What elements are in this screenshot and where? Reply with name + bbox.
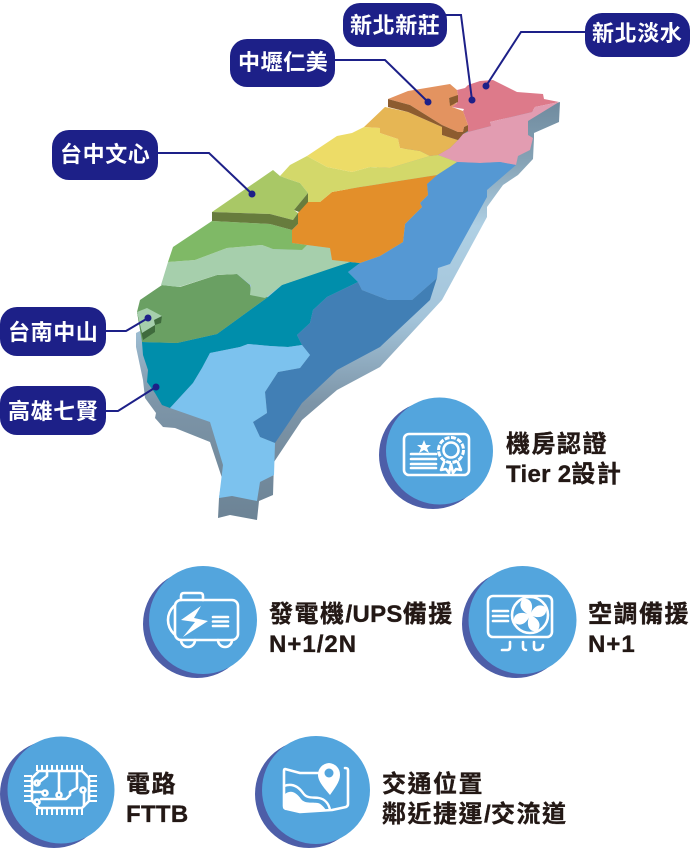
icon: air conditioner bbox=[462, 566, 576, 678]
label: 新北淡水 bbox=[585, 13, 690, 57]
label: 高雄七賢 bbox=[0, 386, 106, 435]
region: pingtung light blue bbox=[170, 344, 310, 501]
connector: 高雄七賢 bbox=[104, 384, 160, 411]
region: hsinchu gold bbox=[364, 107, 458, 156]
region: kaohsiung teal bbox=[142, 262, 360, 408]
region: yilan pink bbox=[438, 102, 559, 165]
text: 電路: 電路 bbox=[126, 771, 177, 798]
text: 電路: FTTB bbox=[126, 801, 189, 828]
label: 台中文心: 台中文心 bbox=[60, 142, 150, 167]
label: 中壢仁美: 中壢仁美 bbox=[238, 50, 328, 75]
region: tainan dark green bbox=[137, 274, 268, 343]
feature: location bbox=[255, 736, 567, 848]
region: tainan raised bbox=[137, 308, 162, 340]
map side extrusion bbox=[136, 102, 560, 520]
text: 機房認證: Tier 2設計 bbox=[506, 461, 622, 488]
region: taichung yellow green bbox=[280, 155, 457, 202]
label: 新北新莊: 新北新莊 bbox=[350, 13, 440, 38]
icon: map pin bbox=[255, 736, 370, 848]
label: 中壢仁美 bbox=[230, 39, 335, 87]
feature: air conditioning bbox=[462, 566, 690, 678]
text: 空調備援: 空調備援 bbox=[588, 601, 690, 628]
taiwan map bbox=[136, 80, 560, 520]
connector: 新北新莊 bbox=[445, 15, 476, 104]
feature: certification bbox=[379, 398, 622, 509]
text: 交通位置: 交通位置 bbox=[382, 770, 484, 798]
label: 台中文心 bbox=[52, 130, 158, 180]
connector: 台中文心 bbox=[156, 153, 256, 198]
text: 空調備援: N+1 bbox=[588, 631, 636, 658]
feature: circuit bbox=[0, 736, 189, 848]
connector: 中壢仁美 bbox=[333, 60, 432, 106]
region: changhua green bbox=[168, 221, 307, 262]
connector: 新北淡水 bbox=[482, 32, 587, 90]
text: 發電機/UPS備援: N+1/2N bbox=[269, 631, 357, 658]
region: taichung raised bbox=[212, 170, 308, 230]
icon: certificate bbox=[379, 398, 493, 509]
region: nantou orange bbox=[292, 175, 437, 263]
connector: 台南中山 bbox=[104, 314, 152, 331]
region: miaoli yellow bbox=[307, 127, 430, 172]
text: 發電機/UPS備援: 發電機/UPS備援 bbox=[269, 601, 454, 628]
icon: circuit chip bbox=[0, 736, 114, 848]
label: 高雄七賢: 高雄七賢 bbox=[8, 399, 98, 424]
label: 台南中山 bbox=[0, 307, 106, 356]
icon: generator bbox=[143, 566, 257, 678]
label: 新北淡水: 新北淡水 bbox=[592, 21, 682, 46]
region: taitung dark blue bbox=[253, 278, 437, 443]
region: hualien blue bbox=[348, 162, 516, 300]
label: 台南中山: 台南中山 bbox=[8, 320, 98, 345]
label: 新北新莊 bbox=[343, 3, 447, 47]
text: 交通位置: 鄰近捷運/交流道 bbox=[382, 801, 567, 828]
feature: generator bbox=[143, 566, 454, 678]
region: chiayi pale green bbox=[161, 245, 350, 298]
text: 機房認證: 機房認證 bbox=[506, 431, 608, 458]
region: new taipei east bbox=[452, 80, 559, 132]
region: taoyuan raised bbox=[388, 84, 468, 140]
